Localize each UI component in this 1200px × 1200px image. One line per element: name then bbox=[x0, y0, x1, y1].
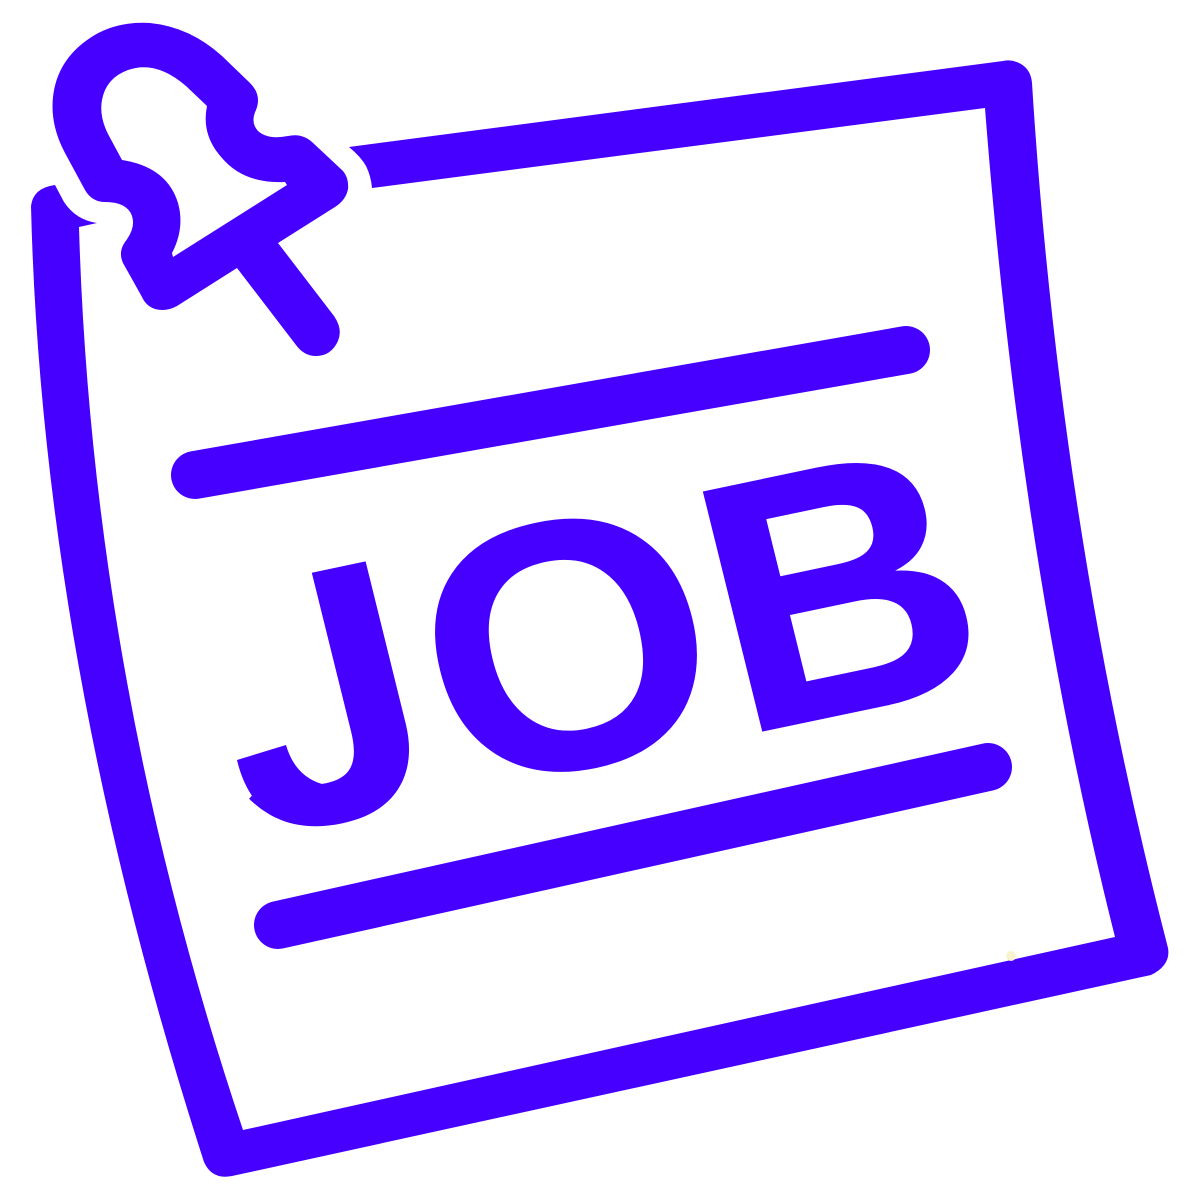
small cream speck bbox=[1006, 951, 1016, 961]
pin bbox=[52, 23, 348, 356]
title word: JOB: O bbox=[378, 423, 756, 868]
bottom line bbox=[278, 767, 988, 925]
top line bbox=[195, 350, 906, 475]
title word: JOB: B bbox=[661, 367, 1017, 809]
title word: JOB: J bbox=[157, 419, 480, 932]
title word: JOB bbox=[157, 367, 1017, 932]
